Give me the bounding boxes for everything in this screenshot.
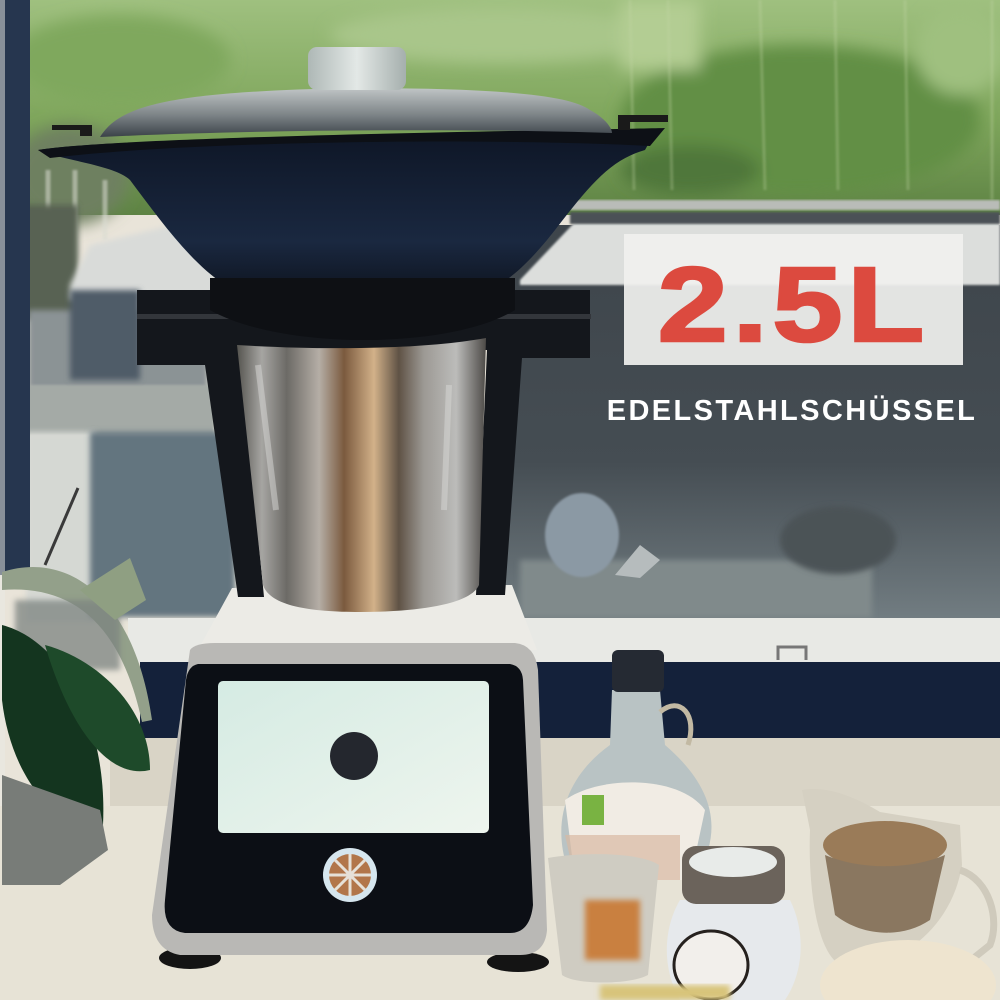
screen logo [330, 732, 378, 780]
caption: EDELSTAHLSCHÜSSEL [607, 395, 977, 427]
right garden building [505, 225, 1000, 620]
plant [2, 488, 152, 885]
capacity value: 2.5L [658, 246, 929, 364]
feet [159, 947, 221, 969]
lid [100, 88, 612, 137]
syrup bottle [561, 650, 711, 880]
rice ball [820, 940, 996, 1000]
salt jar [667, 846, 801, 1000]
lemon [600, 985, 730, 1000]
steel bowl [237, 338, 486, 612]
glass sugar jug [802, 789, 994, 967]
screen [218, 681, 489, 833]
arms [137, 290, 590, 597]
dial [323, 848, 377, 902]
base white top [198, 585, 537, 650]
appliance [38, 47, 668, 972]
shot glass [548, 854, 659, 982]
capacity label box [624, 234, 963, 365]
front panel [152, 643, 547, 955]
wok bowl [38, 132, 655, 301]
lid knob [308, 47, 406, 90]
